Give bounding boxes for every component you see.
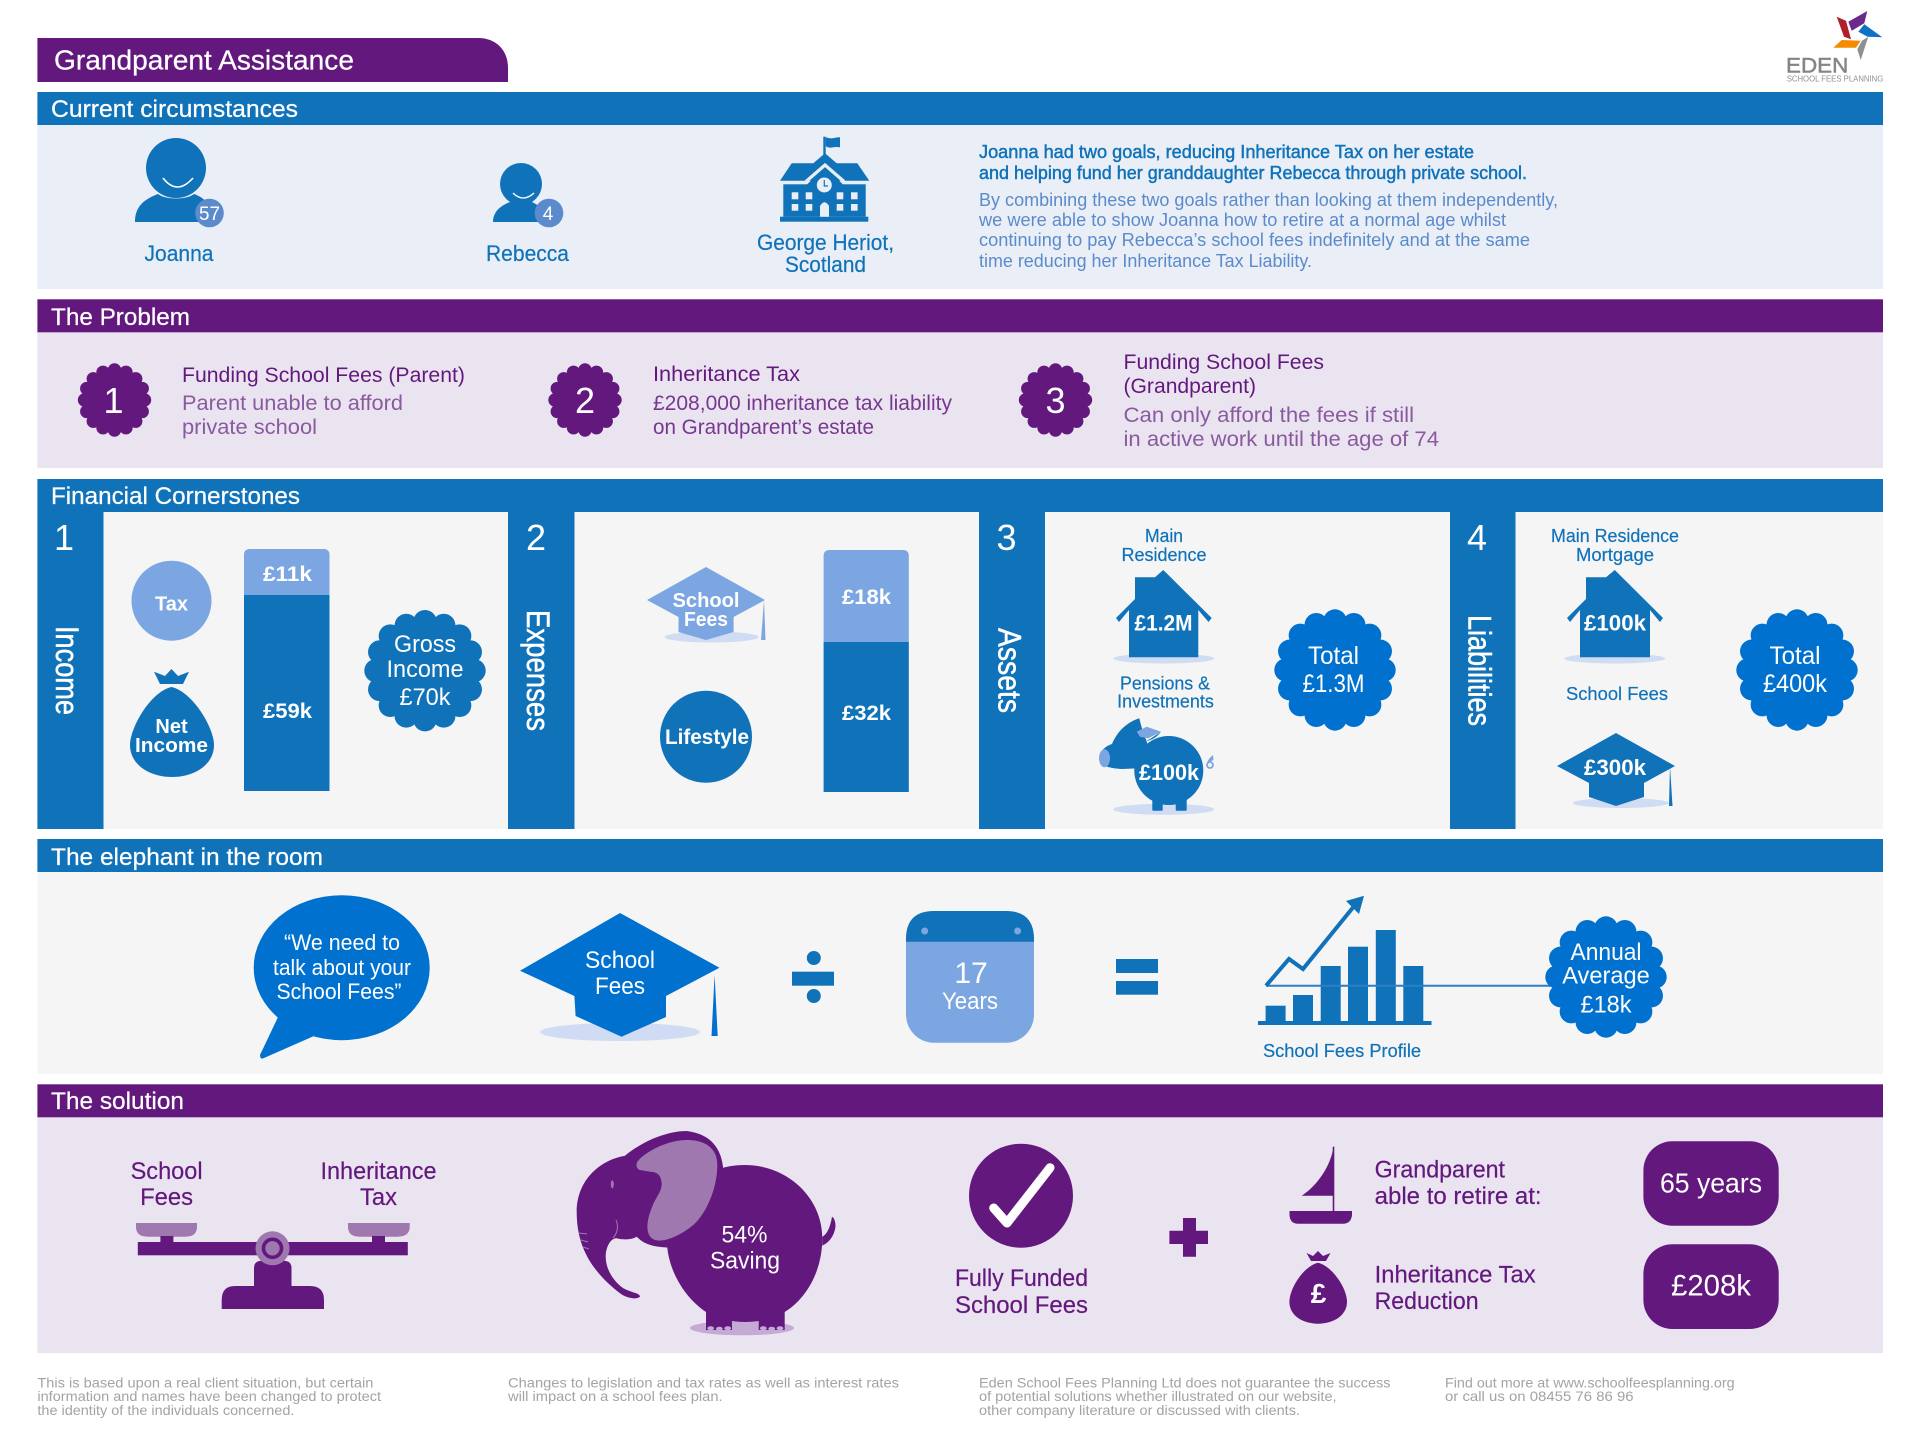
icon: Joanna: 57 [199,204,220,225]
badge: number 2: 2 [575,380,595,421]
stacked bar: expenses: £32k [842,702,891,725]
column tab: 2 Expenses: 2 [526,517,546,558]
label: main residence mortgage: Mortgage [1576,545,1654,565]
icon: calendar 17 years: Years [942,988,998,1015]
icon: pound money bag [1289,1251,1347,1324]
badge: annual average: £18k [1580,992,1632,1019]
panel background: elephant in the room [37,872,1883,1074]
chart: school fees profile [1258,896,1551,1061]
footer: contact details: or call us on 08455 76 86 96 [1445,1388,1634,1404]
badge: number 1 [84,370,144,430]
label: George Heriot, Scotland: Scotland [785,252,866,277]
problem 1 text [182,364,465,439]
icon: divide sign [792,951,834,1003]
pill: 65 years: 65 years [1660,1168,1762,1198]
label: grandparent able to retire: Grandparent [1375,1156,1505,1184]
badge: gross income: Income [386,656,464,683]
column tab: 1 Income [37,512,104,829]
icon: elephant 54% saving: 54% [722,1221,768,1248]
panel background: the problem [37,332,1883,468]
column tab: 4 Liabilities [1450,512,1516,829]
icon: tax circle [132,561,212,641]
badge: total £1.3M: Total [1308,642,1359,670]
stacked bar: expenses [824,550,909,792]
problem 1 text: private school [182,416,317,439]
heading: current circumstances: Current circumstances [51,96,298,123]
column tab: 2 Expenses [508,512,574,829]
badge: gross income: Gross [394,631,456,658]
problem 2 text: £208,000 inheritance tax liability [653,392,952,415]
text block: Joanna's goals: continuing to pay Rebecca’s school fees indefinitely and at the same [979,230,1530,250]
footer: disclaimer 3 [979,1374,1390,1418]
label: inheritance tax reduction: Inheritance Tax [1375,1262,1536,1289]
section: financial cornerstones [37,479,1883,829]
icon: calendar 17 years [906,911,1034,1043]
column tab: 1 Income: 1 [54,517,74,558]
footer: disclaimer 1: This is based upon a real client situation, but certain [37,1374,373,1390]
heading: the problem: The Problem [51,304,190,331]
problem 3 text: (Grandparent) [1124,375,1256,398]
text block: Joanna's goals: we were able to show Joanna how to retire at a normal age whilst [978,210,1506,230]
problem 1 text: Parent unable to afford [182,392,403,415]
label: George Heriot, Scotland [757,230,894,277]
stacked bar: income: £11k [263,563,312,586]
icon: elephant 54% saving [577,1131,836,1335]
footer: disclaimer 3: of potential solutions whether illustrated on our website, [979,1388,1337,1404]
problem 3 text [1124,351,1439,451]
icon: piggy bank £100k: £100k [1139,760,1200,785]
label: inheritance tax on scale [320,1158,436,1211]
heading: the solution: The solution [51,1088,184,1115]
badge: number 2 [555,370,615,430]
icon: Rebecca: 4 [543,204,554,225]
badge: total £400k: £400k [1763,670,1827,698]
heading: the elephant in the room: The elephant in the room [51,844,323,871]
column tab: 4 Liabilities: 4 [1467,517,1487,558]
label: main residence: Residence [1122,545,1206,565]
label: grandparent able to retire [1375,1156,1542,1210]
heading: current circumstances [37,92,1883,125]
label: fully funded school fees [955,1265,1088,1319]
column tab: 2 Expenses: Expenses [520,610,556,731]
chart: school fees profile: School Fees Profile [1263,1041,1421,1061]
speech bubble: “We need to [284,930,400,955]
title banner [37,38,508,82]
badge: total £400k [1748,621,1846,719]
footer: contact details [1445,1374,1735,1404]
icon: hat £300k: £300k [1584,755,1647,780]
badge: number 3: 3 [1045,380,1066,421]
icon: school fees hat: School [672,590,740,612]
icon: net income money bag: Income [135,735,208,757]
footer: contact details: Find out more at www.schoolfeesplanning.org [1445,1374,1735,1390]
heading: the problem [37,299,1883,332]
section: the elephant in the room [37,839,1883,1074]
icon: pound money bag: £ [1311,1278,1327,1309]
footer: disclaimer 3: Eden School Fees Planning Ltd does not guarantee the success [979,1374,1390,1390]
badge: total £1.3M: £1.3M [1302,670,1364,698]
stacked bar: expenses: £18k [842,586,891,609]
speech bubble [254,895,430,1059]
icon: school fees hat: Fees [684,609,728,631]
icon: lifestyle circle [660,691,752,783]
badge: gross income: £70k [400,684,451,711]
section: current circumstances [37,92,1883,289]
footer: disclaimer 2 [507,1374,899,1404]
label: main residence mortgage [1551,526,1679,565]
text block: Joanna's goals [978,142,1558,271]
label: inheritance tax reduction: Reduction [1375,1288,1479,1315]
label: George Heriot, Scotland: George Heriot, [757,230,894,255]
section: the problem [37,299,1883,468]
stacked bar: income: £59k [263,700,312,723]
problem 3 text: Can only afford the fees if still [1124,404,1414,427]
problem 2 text: on Grandparent’s estate [653,416,874,439]
icon: tick circle [969,1144,1073,1248]
label: Joanna: Joanna [144,241,214,266]
label: pensions and investments [1117,674,1214,712]
problem 1 text: Funding School Fees (Parent) [182,364,465,387]
badge: annual average: Annual [1570,939,1642,966]
text block: Joanna's goals: By combining these two goals rather than looking at them independently, [979,190,1558,210]
heading: financial cornerstones [37,479,1883,512]
footer: disclaimer 1 [37,1374,381,1418]
text block: Joanna's goals: and helping fund her granddaughter Rebecca through private school. [979,163,1527,183]
footer: disclaimer 2: will impact on a school fees plan. [507,1388,723,1404]
label: school fees on scale: Fees [140,1184,193,1211]
speech bubble: School Fees” [276,979,402,1004]
icon: plus sign [1169,1218,1208,1257]
label: inheritance tax on scale: Inheritance [320,1158,436,1185]
icon: sailing boat [1290,1147,1352,1224]
badge: total £1.3M [1286,621,1384,719]
badge: annual average: Average [1562,962,1650,990]
label: fully funded school fees: Fully Funded [955,1265,1088,1292]
icon: house £1.2M: £1.2M [1134,611,1192,636]
icon: house £100k [1564,570,1665,664]
logo: Eden School Fees Planning: SCHOOL FEES PLANNING [1787,75,1883,84]
column tab: 4 Liabilities: Liabilities [1462,615,1498,726]
icon: Joanna [135,138,224,227]
problem 3 text: in active work until the age of 74 [1124,428,1439,451]
label: grandparent able to retire: able to retire at: [1375,1183,1542,1210]
label: inheritance tax on scale: Tax [360,1184,397,1211]
icon: piggy bank £100k [1099,718,1214,815]
speech bubble: talk about your [273,955,411,980]
label: inheritance tax reduction [1375,1262,1536,1315]
label: school fees on scale: School [131,1158,203,1185]
icon: house £1.2M [1113,570,1214,664]
column tab: 3 Assets [979,512,1045,829]
badge: annual average [1557,928,1655,1026]
icon: Rebecca [493,163,563,227]
label: main residence: Main [1145,526,1183,546]
panel background: cornerstones [37,512,1883,829]
icon: equals sign [1116,959,1158,995]
icon: school fees mortarboard: School [585,947,655,974]
icon: net income money bag: Net [155,716,188,738]
column tab: 3 Assets: Assets [992,628,1028,713]
pill: 65 years [1643,1141,1779,1226]
label: pensions and investments: Investments [1117,692,1214,712]
icon: elephant 54% saving: Saving [710,1247,780,1274]
icon: balance scale [136,1223,410,1309]
footer: disclaimer 1: information and names have been changed to protect [37,1388,381,1404]
label: pensions and investments: Pensions & [1120,674,1210,694]
icon: school fees mortarboard [520,913,720,1041]
badge: number 3 [1026,370,1086,430]
badge: number 1: 1 [103,380,124,421]
badge: gross income [376,622,474,720]
icon: school building [780,137,869,222]
icon: tax circle: Tax [155,594,188,616]
logo: Eden School Fees Planning [1786,11,1883,84]
heading: the solution [37,1084,1883,1117]
label: Rebecca: Rebecca [486,241,570,266]
title banner: Grandparent Assistance [54,44,354,76]
icon: net income money bag [130,669,214,777]
footer: disclaimer 3: other company literature or discussed with clients. [979,1402,1300,1418]
problem 2 text: Inheritance Tax [653,363,801,386]
logo: Eden School Fees Planning: EDEN [1786,54,1848,78]
panel background: current circumstances [37,125,1883,289]
icon: school fees hat [647,567,766,642]
heading: the elephant in the room [37,839,1883,872]
icon: lifestyle circle: Lifestyle [665,726,749,749]
label: school fees on scale [131,1158,203,1211]
stacked bar: income [244,549,330,791]
footer: disclaimer 2: Changes to legislation and tax rates as well as interest rates [508,1374,899,1390]
label: main residence mortgage: Main Residence [1551,526,1679,546]
text block: Joanna's goals: Joanna had two goals, reducing Inheritance Tax on her estate [979,142,1474,162]
icon: hat £300k [1557,733,1675,808]
problem 2 text [653,363,952,439]
text block: Joanna's goals: time reducing her Inheritance Tax Liability. [979,251,1312,271]
pill: £208k [1643,1244,1779,1329]
section: the solution [37,1084,1883,1353]
icon: calendar 17 years: 17 [954,957,988,990]
icon: house £100k: £100k [1584,611,1647,636]
badge: total £400k: Total [1770,642,1820,670]
column tab: 1 Income: Income [49,626,85,715]
label: main residence [1122,526,1206,565]
label: fully funded school fees: School Fees [955,1292,1088,1319]
icon: school fees mortarboard: Fees [595,973,645,1000]
label: school fees: School Fees [1566,684,1668,704]
pill: £208k: £208k [1671,1270,1752,1303]
column tab: 3 Assets: 3 [996,517,1017,558]
problem 3 text: Funding School Fees [1124,351,1324,374]
heading: financial cornerstones: Financial Cornerstones [51,483,300,510]
footer: disclaimer 1: the identity of the individuals concerned. [37,1402,294,1418]
panel background: the solution [37,1117,1883,1353]
